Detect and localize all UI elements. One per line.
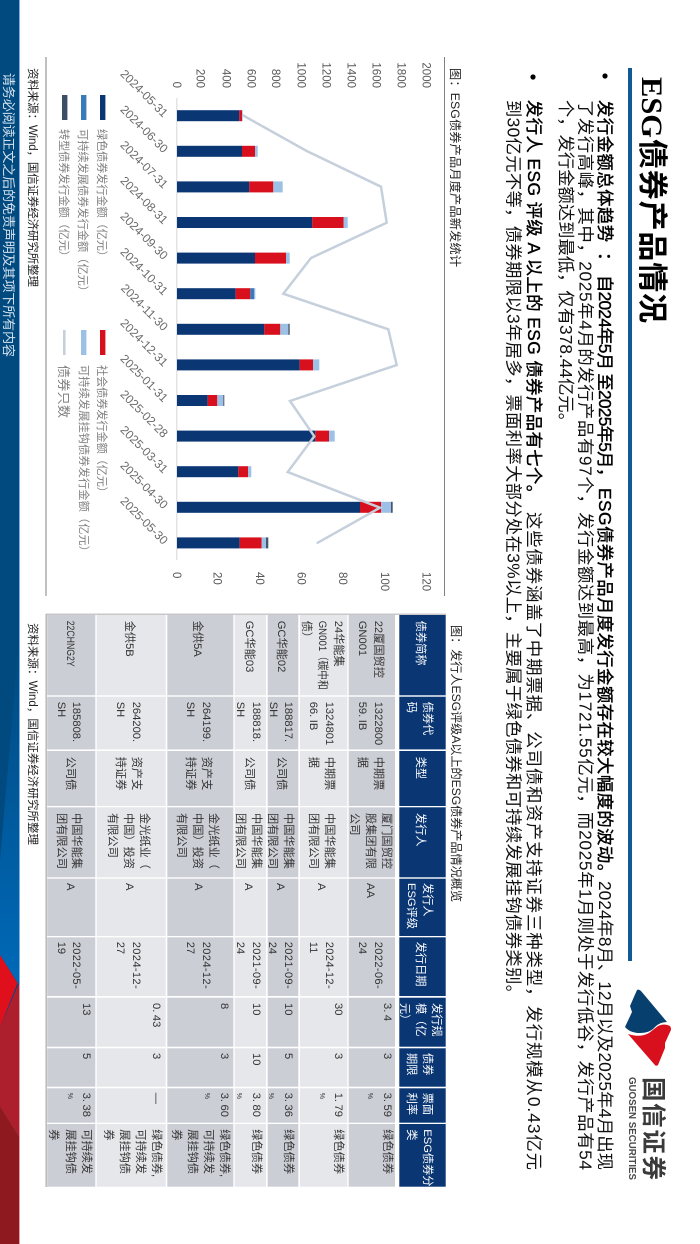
table header: ESG债券分 <box>421 1129 435 1187</box>
table row: GC华能02: 绿色债券 <box>282 1129 296 1174</box>
date axis: 2025-03-31 <box>117 423 171 476</box>
chart legend: 可持续发展挂钩债券发行金额（亿元） <box>77 365 91 557</box>
left value axis: 1400 <box>345 62 357 88</box>
table row: 22CHNG2Y: 可持续发 <box>80 1129 94 1174</box>
table row: 24华能集GN001: 24华能集 <box>332 621 346 667</box>
right value axis: 20 <box>210 572 222 585</box>
table row: 24华能集GN001: 中期票 <box>323 757 336 790</box>
table row: GC华能02: % <box>267 1093 274 1099</box>
table row: 22厦国贸控GN001: 3. 59 <box>381 1093 393 1117</box>
table header: 类 <box>405 1129 419 1141</box>
table row: 金供5B <box>97 615 166 1187</box>
table header: 发行日期 <box>414 942 428 986</box>
table row: 金供5A: 金供5A <box>191 621 205 657</box>
chart legend: 债券只数 <box>56 365 71 418</box>
axis labels <box>117 62 432 591</box>
table row: 22厦国贸控GN001: 3. 4 <box>381 1003 393 1021</box>
chart source note: 资料来源：Wind，国信证券经济研究所整理 <box>26 68 40 288</box>
chart legend: 社会债券发行金额（亿元） <box>95 365 109 498</box>
table row: 24华能集GN001: 11 <box>307 942 319 953</box>
right value axis: 0 <box>170 572 182 578</box>
table row: 22CHNG2Y: 公司债 <box>64 757 78 790</box>
table row: 22CHNG2Y: % <box>66 1093 73 1099</box>
footer disclaimer text: 请务必阅读正文之后的免责声明及其项下所有内容 <box>1 73 16 357</box>
table header: 发行人 <box>414 813 428 847</box>
table row: 金供5B: 可持续发 <box>134 1129 148 1174</box>
right value axis: 100 <box>378 572 390 591</box>
title: ESG <box>635 77 668 138</box>
table row: 22CHNG2Y: 22CHNG2Y <box>64 621 76 667</box>
table row: GC华能03: 10 <box>250 1003 262 1015</box>
date axis <box>117 67 171 548</box>
logo: Guosen Securities <box>625 990 671 1180</box>
table row: 22厦国贸控GN001: 据 <box>356 757 370 768</box>
left value axis: 600 <box>245 69 257 88</box>
table row: 22厦国贸控GN001: GN001 <box>356 621 368 656</box>
left value axis: 0 <box>170 82 182 88</box>
title: 债券产品情况 <box>635 139 668 323</box>
table row: 22CHNG2Y: 展挂钩债 <box>64 1129 78 1174</box>
stacked bars <box>177 110 393 548</box>
bullet 1 text: 个，发行金额达到最低，仅有378.44亿元。 <box>556 100 576 430</box>
bullet 2 dot <box>530 74 536 80</box>
right value axis: 40 <box>253 572 265 585</box>
table row: 金供5B: A <box>123 883 135 891</box>
table header <box>398 615 446 1187</box>
table row: GC华能02: 24 <box>266 942 278 954</box>
table row: GC华能03: 188818. <box>250 702 262 742</box>
left value axis: 800 <box>269 69 281 88</box>
table source note: 资料来源：Wind，国信证券经济研究所整理 <box>26 623 40 846</box>
chart legend: 绿色债券发行金额（亿元） <box>95 129 109 262</box>
table row: GC华能02: 10 <box>282 1003 294 1015</box>
table row: 金供5A: 可持续发 <box>202 1129 216 1174</box>
chart: monthly ESG bond issuance <box>117 62 432 591</box>
table header: ESG评级 <box>405 883 418 929</box>
left value axis <box>170 62 432 88</box>
left value axis: 400 <box>220 69 232 88</box>
table row: 金供5B: 264200. <box>130 702 142 742</box>
bullet 1 text: 了发行高峰，其中，2025年4月的发行产品有97个，发行金额达到最高，为1721.55亿元，而2025年1月则处于发行低谷，发行产品有54 <box>576 100 596 1170</box>
table row: GC华能02: 公司债 <box>275 757 289 790</box>
right value axis: 60 <box>295 572 307 585</box>
title rule <box>628 68 632 961</box>
table row: GC华能03 <box>234 615 266 1187</box>
table row: 金供5B: 2024-12- <box>130 942 142 989</box>
bullet 1 text: 2024年8月、12月以及2025年4月出现 <box>595 881 615 1170</box>
date axis: 2024-05-31 <box>117 67 171 120</box>
table row: 22CHNG2Y: 3. 38 <box>80 1093 92 1117</box>
icon: blue logo mark <box>625 990 667 1033</box>
table row: 金供5B: 27 <box>114 942 126 954</box>
table row: 金供5B: 展挂钩债 <box>118 1129 132 1174</box>
date axis: 2024-11-30 <box>118 281 171 334</box>
line: bond count <box>242 115 397 543</box>
table row: 金供5A: 中国）投资 <box>191 813 205 869</box>
table row: 24华能集GN001: 66. IB <box>307 702 319 730</box>
table header: 发行规 <box>430 1003 444 1037</box>
date axis: 2024-12-31 <box>117 316 171 370</box>
panel frame line right <box>444 57 445 596</box>
table header: 模（亿 <box>414 1003 427 1037</box>
table row: GC华能03: 3. 80 <box>250 1093 262 1117</box>
table row: 金供5A: SH <box>184 702 196 717</box>
table row: GC华能02: 5 <box>282 1053 294 1059</box>
table row: GC华能03: 10 <box>250 1053 262 1065</box>
left value axis: 1200 <box>320 62 332 88</box>
table row: 24华能集GN001 <box>300 615 347 1187</box>
table row: 金供5B: 绿色债券, <box>150 1129 164 1177</box>
right value axis: 80 <box>336 572 348 585</box>
table row: 24华能集GN001: 1. 79 <box>332 1093 344 1117</box>
table row: 22厦国贸控GN001: 厦门国贸控 <box>380 813 394 869</box>
date axis: 2024-07-31 <box>117 138 171 192</box>
table row: 24华能集GN001: % <box>318 1093 325 1099</box>
icon: red logo mark <box>628 1024 671 1066</box>
table row: 24华能集GN001: 3 <box>332 1053 344 1059</box>
left value axis: 200 <box>194 69 206 88</box>
table row: 22CHNG2Y: 185808. <box>70 702 82 742</box>
table row: GC华能03: 绿色债券 <box>250 1129 264 1174</box>
date axis: 2024-10-31 <box>117 245 171 298</box>
table row: 22厦国贸控GN001: 股集团有限 <box>364 813 378 869</box>
table row: 22CHNG2Y <box>47 615 95 1187</box>
table row: 金供5B: 金供5B <box>123 621 137 657</box>
table row: GC华能02: SH <box>267 702 279 717</box>
table row: 金供5A: 2024-12- <box>200 942 212 989</box>
table row: 金供5A: 资产支 <box>200 757 214 790</box>
table header: 利率 <box>405 1093 419 1115</box>
table row: 金供5B: 券 <box>102 1129 116 1141</box>
bullet 2 text: 发行人 ESG 评级 A 以上的 ESG 债券产品有七个。 <box>524 100 544 502</box>
table row: 金供5A: % <box>203 1093 210 1099</box>
table row: 22CHNG2Y: 19 <box>55 942 67 954</box>
table header: 债券代 <box>421 702 435 735</box>
table row: 22厦国贸控GN001: % <box>366 1093 373 1099</box>
right value axis: 120 <box>420 572 432 591</box>
table row: 22厦国贸控GN001: 24 <box>356 942 368 954</box>
table row: 22CHNG2Y: 13 <box>80 1003 92 1015</box>
bullet 1 text: ： <box>595 252 615 269</box>
chart legend: 可持续发展债券发行金额（亿元） <box>76 129 90 297</box>
table row: 22CHNG2Y: 团有限公司 <box>55 813 69 869</box>
table row: 金供5B: 0. 43 <box>150 1003 162 1027</box>
table row: GC华能03: % <box>235 1093 242 1099</box>
table row: GC华能03: 团有限公司 <box>234 813 248 869</box>
table row: 22厦国贸控GN001 <box>348 615 395 1187</box>
table header: 票面 <box>421 1093 434 1115</box>
table row: GC华能02: 团有限公司 <box>266 813 280 869</box>
table row: 金供5A: 27 <box>184 942 196 954</box>
table row: 金供5A <box>167 615 233 1187</box>
table row: GC华能03: 24 <box>234 942 246 954</box>
table row: 22CHNG2Y: 中国华能集 <box>70 813 84 869</box>
table row: 金供5B: 金光纸业（ <box>138 813 152 869</box>
bullet 2 text: 这些债券涵盖了中期票据、公司债和资产支持证券三种类型，发行规模从0.43亿元 <box>524 512 544 1170</box>
bullet 1 text: ESG债券产品月度发行金额存在较大幅度的波动。 <box>595 488 615 881</box>
table row: 金供5B: 资产支 <box>130 757 144 790</box>
table row: 24华能集GN001: 绿色债券 <box>332 1129 346 1174</box>
table row: 24华能集GN001: 中国华能集 <box>323 813 337 869</box>
table row: GC华能03: GC华能03 <box>243 621 257 672</box>
date axis: 2025-04-30 <box>117 458 171 512</box>
table row: 金供5A: 绿色债券, <box>218 1129 232 1177</box>
table row: GC华能03: 公司债 <box>243 757 257 790</box>
table heading: 图：发行人ESG评级A以上的ESG债券产品情况概览 <box>449 625 464 902</box>
left value axis: 2000 <box>420 62 432 88</box>
table row: 22厦国贸控GN001: AA <box>364 883 376 898</box>
table row: 金供5A: A <box>192 883 204 891</box>
table row: 金供5A: 264199. <box>200 702 212 742</box>
table row: 24华能集GN001: 30 <box>332 1003 344 1015</box>
table row: 22厦国贸控GN001: 3 <box>381 1053 393 1059</box>
table row: 22厦国贸控GN001: 中期票 <box>372 757 385 790</box>
date axis: 2025-01-31 <box>117 352 171 405</box>
table row: 金供5B: 持证券 <box>114 757 128 790</box>
date axis: 2024-09-30 <box>117 209 171 263</box>
table row: 金供5A: 3 <box>218 1053 230 1059</box>
bullet 1 text: 自2024年5月 至2025年5月， <box>595 275 615 485</box>
table row: 金供5A: 展挂钩债 <box>186 1129 200 1174</box>
table row: GC华能03: A <box>242 883 254 891</box>
bullet 2 text: 到30亿元不等，债券期限以3年居多，票面利率大部分处在3%以上，主要属于绿色债券和可持续发展挂钩债券类别。 <box>504 100 524 1002</box>
table row: 24华能集GN001: 2024-12- <box>323 942 335 989</box>
table row: 金供5A: 3. 60 <box>218 1093 230 1117</box>
logo English name: GUOSEN SECURITIES <box>626 1077 638 1180</box>
table header: 元） <box>398 1003 411 1025</box>
table row: GC华能02: 3. 36 <box>282 1093 294 1117</box>
bullet 1 text: 发行金额总体趋势 <box>595 100 615 242</box>
table row: 24华能集GN001: 据 <box>307 757 321 768</box>
table header: 发行人 <box>421 883 435 917</box>
table row: GC华能02: GC华能02 <box>275 621 289 672</box>
table row: 24华能集GN001: A <box>315 883 327 891</box>
bullet 1 dot <box>602 73 608 79</box>
table row: GC华能02: 2021-09- <box>282 942 294 989</box>
table row: 22CHNG2Y: 券 <box>47 1129 61 1141</box>
table row: GC华能02: 中国华能集 <box>282 813 296 869</box>
bullet text block <box>504 73 615 1170</box>
table row: 22厦国贸控GN001: 绿色债券 <box>381 1129 395 1174</box>
bullet 1 text <box>556 100 615 1170</box>
table: ESG bonds rated A or above <box>45 614 446 1187</box>
chart legend: 转型债券发行金额（亿元） <box>57 129 71 262</box>
table header: 债券简称 <box>414 621 428 665</box>
table row: 金供5A: 金光纸业（ <box>207 813 221 869</box>
table row: 22厦国贸控GN001: 59. IB <box>356 702 368 730</box>
table row: 22CHNG2Y: 5 <box>80 1053 92 1059</box>
left value axis: 1600 <box>370 62 382 88</box>
table row: 24华能集GN001: GN001（碳中和 <box>316 621 330 690</box>
table row: 金供5B: 3 <box>150 1053 162 1059</box>
table header: 类型 <box>414 757 428 779</box>
date axis: 2025-02-28 <box>117 387 171 441</box>
table row: 金供5B: SH <box>114 702 126 717</box>
table row: 22厦国贸控GN001: 22厦国贸控 <box>372 621 386 678</box>
footer band <box>0 0 20 1244</box>
table row: 22CHNG2Y: 2022-05- <box>70 942 82 989</box>
table row: 22厦国贸控GN001: 公司 <box>348 813 360 835</box>
chart legend <box>56 95 109 557</box>
chart heading: 图：ESG债券产品月度产品新发统计 <box>448 68 463 267</box>
logo wordmark: 国信证券 <box>639 1077 667 1180</box>
left value axis: 1000 <box>295 62 307 88</box>
table row: GC华能02: 188817. <box>282 702 294 742</box>
table row: GC华能03: 2021-09- <box>250 942 262 989</box>
table row: GC华能02: A <box>274 883 286 891</box>
table row: GC华能02 <box>266 615 298 1187</box>
bullet 2 text <box>504 100 544 1170</box>
table row: 金供5A: 8 <box>218 1003 230 1009</box>
date axis: 2024-06-30 <box>117 102 171 156</box>
table header: 码 <box>405 702 418 713</box>
date axis: 2025-05-30 <box>117 494 171 548</box>
table row: 24华能集GN001: 团有限公司 <box>307 813 321 869</box>
table header: 债券 <box>421 1053 435 1075</box>
panel frame line left <box>46 57 47 596</box>
table row: 24华能集GN001: 1324801 <box>323 702 335 745</box>
right value axis <box>170 572 432 591</box>
table row: 金供5A: 券 <box>170 1129 184 1141</box>
table row: 金供5A: 有限公司 <box>175 813 189 858</box>
table row: 24华能集GN001: 债） <box>300 621 314 643</box>
table row: GC华能03: SH <box>234 702 246 717</box>
table row: GC华能03: 中国华能集 <box>250 813 264 869</box>
table row: 金供5B: — <box>150 1093 162 1105</box>
left value axis: 1800 <box>395 62 407 88</box>
table row: 22厦国贸控GN001: 2022-06- <box>372 942 384 989</box>
table row: 22CHNG2Y: SH <box>55 702 67 717</box>
table header: 期限 <box>405 1053 418 1075</box>
table row: 22CHNG2Y: A <box>64 883 76 891</box>
table row: 22厦国贸控GN001: 1322800 <box>372 702 384 745</box>
table row: 金供5B: 有限公司 <box>106 813 120 858</box>
date axis: 2024-08-31 <box>117 174 171 227</box>
table row: 金供5B: 中国）投资 <box>122 813 136 869</box>
table row: 金供5A: 持证券 <box>184 757 198 790</box>
